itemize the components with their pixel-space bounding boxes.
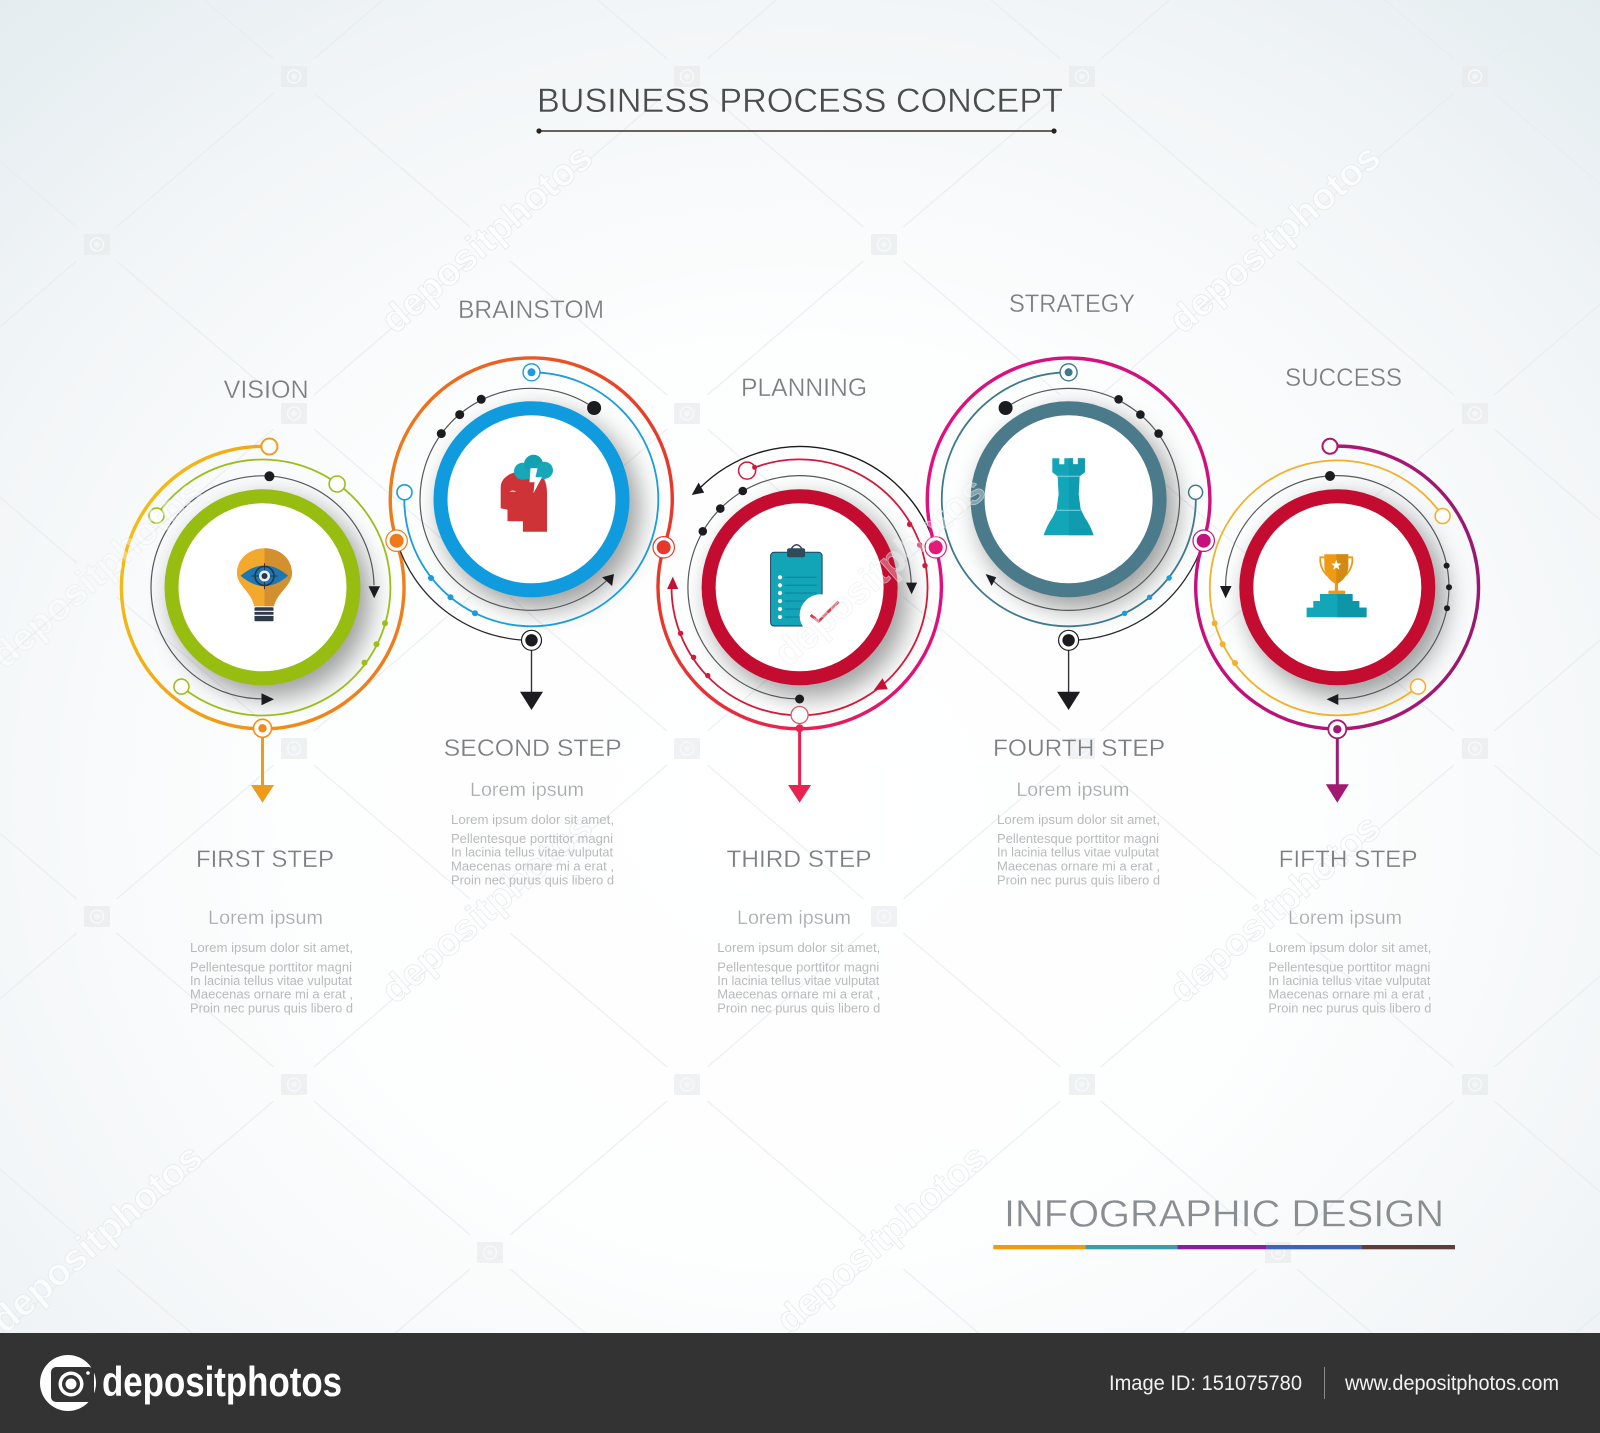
text block: first step: Proin nec purus quis libero d <box>190 1001 353 1015</box>
nodes <box>149 438 388 694</box>
icon: light bulb with eye <box>237 548 292 621</box>
gray arc <box>1226 476 1449 699</box>
icon: logo camera <box>40 1355 96 1411</box>
red arc <box>672 459 928 715</box>
black arc <box>397 541 532 640</box>
text block: third step: Lorem ipsum dolor sit amet, <box>717 941 880 955</box>
text block: fourth step: Pellentesque porttitor magni <box>997 832 1159 846</box>
arrow down <box>251 719 274 803</box>
text block: first step: Lorem ipsum <box>208 908 323 929</box>
icon: clipboard with check <box>771 545 842 636</box>
yellow arc <box>1210 460 1443 715</box>
label: success: SUCCESS <box>1285 364 1402 392</box>
text block: third step <box>717 846 880 1015</box>
multicolor underline <box>993 1245 1455 1249</box>
nodes <box>397 364 601 616</box>
ring shadow <box>710 499 908 697</box>
icon: trophy on podium <box>1307 554 1367 617</box>
arrowheads <box>262 586 380 705</box>
black arc <box>1069 541 1204 640</box>
text block: third step: Proin nec purus quis libero d <box>717 1001 880 1015</box>
text block: second step: SECOND STEP <box>444 735 622 762</box>
text block: second step: Pellentesque porttitor magni <box>451 832 613 846</box>
outer arc <box>390 358 672 547</box>
outer arc <box>658 547 941 729</box>
text block: fifth step: Proin nec purus quis libero d <box>1268 1001 1431 1015</box>
text block: third step: Lorem ipsum <box>737 908 851 929</box>
nodes <box>678 462 928 724</box>
step 4: strategy <box>927 358 1210 710</box>
label: brainstorm: BRAINSTOM <box>458 296 604 324</box>
text block: first step: In lacinia tellus vitae vulputat <box>190 974 353 988</box>
ring <box>440 408 622 590</box>
teal arc <box>942 372 1196 626</box>
watermark text: depositphotos <box>1161 136 1389 342</box>
text block: second step: Lorem ipsum <box>470 780 584 801</box>
blue arc <box>404 372 658 626</box>
step 2: brainstorm <box>390 358 672 710</box>
junction node 2 <box>653 537 674 558</box>
arrowheads <box>1220 586 1338 705</box>
ring shadow <box>442 411 640 609</box>
junction node 3 <box>925 537 946 558</box>
label: strategy: STRATEGY <box>1009 290 1135 318</box>
title: BUSINESS PROCESS CONCEPT <box>537 82 1063 120</box>
text block: third step: In lacinia tellus vitae vulputat <box>717 974 880 988</box>
text block: fourth step: FOURTH STEP <box>993 735 1165 762</box>
arrow down <box>1326 720 1349 803</box>
text block: fourth step: Maecenas ornare mi a erat , <box>997 860 1160 874</box>
icon: chess rook <box>1044 458 1094 535</box>
text block: second step: In lacinia tellus vitae vulputat <box>451 845 614 859</box>
gray arc <box>151 476 374 699</box>
heading: infographic design: INFOGRAPHIC DESIGN <box>1004 1194 1444 1236</box>
footer bar <box>0 1333 1600 1433</box>
icon: head with storm cloud <box>501 455 553 532</box>
text block: fifth step: Pellentesque porttitor magni <box>1268 961 1430 975</box>
step 5: success <box>1196 439 1479 803</box>
text block: second step <box>444 735 622 888</box>
arrowheads <box>667 483 917 690</box>
gray arc <box>688 476 911 699</box>
ring <box>709 496 891 678</box>
black arc <box>700 447 936 547</box>
ring <box>1246 496 1428 678</box>
outer arc <box>927 358 1210 547</box>
label: vision: VISION <box>224 376 309 404</box>
text block: fourth step: Lorem ipsum dolor sit amet, <box>997 813 1160 827</box>
watermark text: depositphotos <box>373 136 601 342</box>
text block: fourth step: Proin nec purus quis libero d <box>997 874 1160 888</box>
text block: first step <box>190 846 353 1015</box>
nodes <box>1212 439 1452 694</box>
logo wordmark: depositphotos <box>102 1358 342 1405</box>
outer arc <box>121 446 404 729</box>
text block: second step: Lorem ipsum dolor sit amet, <box>451 813 614 827</box>
watermark text: depositphotos <box>373 806 601 1012</box>
ring <box>978 408 1160 590</box>
outer arc <box>1196 446 1479 729</box>
gray arc <box>420 388 608 610</box>
text block: first step: Maecenas ornare mi a erat , <box>190 987 353 1001</box>
junction node 4 <box>1193 530 1214 551</box>
text block: second step: Maecenas ornare mi a erat , <box>451 860 614 874</box>
text block: fourth step: Lorem ipsum <box>1016 780 1129 801</box>
watermark text over rings <box>0 469 994 677</box>
gray arc <box>992 388 1180 610</box>
step 3: planning <box>658 447 941 803</box>
arrow down <box>520 630 543 710</box>
text block: fifth step: In lacinia tellus vitae vulputat <box>1268 974 1431 988</box>
ring shadow <box>1247 499 1445 697</box>
junction node 1 <box>386 530 407 551</box>
text block: fifth step: Maecenas ornare mi a erat , <box>1268 987 1431 1001</box>
watermark camera icons <box>84 66 1488 1263</box>
text block: fourth step: In lacinia tellus vitae vulputat <box>997 845 1160 859</box>
arrowhead <box>986 574 996 586</box>
ring shadow <box>979 411 1177 609</box>
text block: fifth step: Lorem ipsum dolor sit amet, <box>1268 941 1431 955</box>
green arc <box>156 459 390 715</box>
text block: fifth step: Lorem ipsum <box>1288 908 1402 929</box>
text block: first step: FIRST STEP <box>196 846 334 873</box>
ring shadow <box>172 499 370 697</box>
watermark text <box>0 136 1389 1342</box>
text block: third step: Pellentesque porttitor magni <box>717 961 879 975</box>
watermark text: depositphotos <box>1161 806 1389 1012</box>
text block: first step: Lorem ipsum dolor sit amet, <box>190 941 353 955</box>
label: planning: PLANNING <box>741 374 867 402</box>
arrow down <box>788 724 811 803</box>
text block: fifth step <box>1268 846 1431 1015</box>
ring <box>172 496 354 678</box>
text block: fifth step: FIFTH STEP <box>1279 846 1418 873</box>
website: www.depositphotos.com <box>1344 1372 1559 1395</box>
text block: third step: THIRD STEP <box>726 846 872 873</box>
text block: fourth step <box>993 735 1165 888</box>
arrow down <box>1057 630 1080 710</box>
step 1: vision <box>121 438 404 803</box>
text block: first step: Pellentesque porttitor magni <box>190 961 352 975</box>
watermark text over rings: depositphotos <box>766 469 994 675</box>
image id: Image ID: 151075780 <box>1109 1372 1302 1395</box>
watermark text: depositphotos <box>768 1136 996 1342</box>
text block: second step: Proin nec purus quis libero d <box>451 874 614 888</box>
nodes <box>999 364 1203 616</box>
arrowhead <box>602 574 614 586</box>
text block: third step: Maecenas ornare mi a erat , <box>717 987 880 1001</box>
